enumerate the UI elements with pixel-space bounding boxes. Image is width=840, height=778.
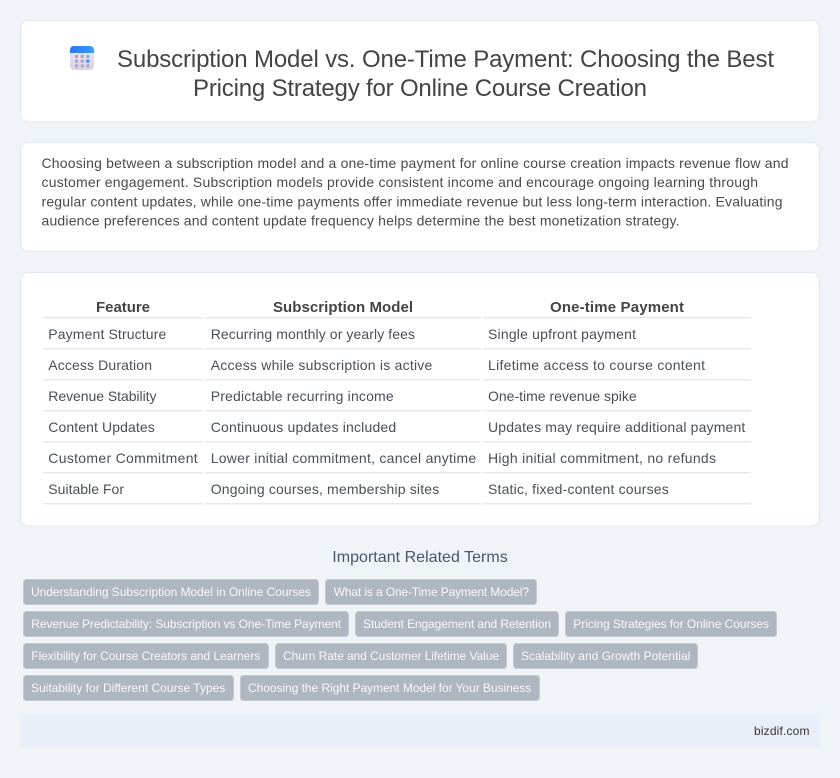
table row: Payment Structure: Payment Structure	[48, 326, 167, 342]
table row: Customer Commitment: High initial commitment, no refunds	[488, 450, 716, 466]
text block: introduction paragraph: regular content updates, while one-time payments offer immediate revenue but less long-term interaction. Evaluating	[42, 194, 782, 210]
table row: Content Updates: Continuous updates included	[211, 419, 396, 435]
table row: Revenue Stability: Revenue Stability	[48, 388, 156, 404]
tag: pricing strategies: Pricing Strategies for Online Courses	[573, 617, 769, 631]
panel: related term tags	[24, 580, 776, 700]
table row: Access Duration: Access while subscription is active	[211, 357, 433, 373]
tag: churn rate: Churn Rate and Customer Lifetime Value	[283, 649, 499, 663]
tag: understanding subscription model	[24, 580, 318, 604]
tag: churn rate	[276, 644, 506, 668]
table row: Customer Commitment: Lower initial commitment, cancel anytime	[211, 450, 476, 466]
tag: student engagement: Student Engagement and Retention	[363, 617, 551, 631]
table row: Customer Commitment	[48, 450, 716, 466]
tag: suitability: Suitability for Different Course Types	[31, 681, 225, 695]
table row: Suitable For	[48, 481, 669, 497]
heading: important related terms: Important Related Terms	[332, 549, 508, 566]
panel: introduction	[20, 142, 820, 252]
tag: scalability	[514, 644, 698, 668]
text block: introduction paragraph: audience preferences and content update frequency helps determine the best monetization strategy.	[42, 212, 680, 228]
table row: Content Updates	[48, 419, 745, 435]
text block: introduction paragraph: customer engagement. Subscription models provide consistent income and encourage ongoing learning through	[42, 174, 758, 190]
table row: Customer Commitment: Customer Commitment	[48, 450, 198, 466]
table header row: One-time Payment	[550, 299, 684, 316]
table row: Content Updates: Updates may require additional payment	[488, 419, 745, 435]
title: Subscription Model vs. One-Time Payment: Choosing the Best	[117, 46, 774, 73]
table row: Revenue Stability: Predictable recurring income	[211, 388, 394, 404]
panel: title header	[20, 20, 820, 122]
title: Pricing Strategy for Online Course Creation	[193, 75, 647, 102]
tag: choosing the right model	[240, 676, 540, 700]
tag: revenue predictability	[24, 612, 348, 636]
table row: Suitable For: Static, fixed-content courses	[488, 481, 669, 497]
table row: Payment Structure	[48, 326, 636, 342]
tag: flexibility: Flexibility for Course Creators and Learners	[31, 649, 260, 663]
table row: Access Duration	[48, 357, 705, 373]
tag: suitability	[24, 676, 234, 700]
title	[117, 46, 774, 102]
table row: Suitable For: Suitable For	[48, 481, 124, 497]
icon: calendar	[70, 46, 94, 70]
text block: introduction paragraph	[42, 155, 788, 228]
table row: Payment Structure: Recurring monthly or yearly fees	[211, 326, 415, 342]
table header row: Subscription Model	[273, 299, 413, 316]
table row: Access Duration: Access Duration	[48, 357, 152, 373]
table row: Revenue Stability: One-time revenue spike	[488, 388, 637, 404]
table row: Revenue Stability	[48, 388, 637, 404]
text block: introduction paragraph: Choosing between a subscription model and a one-time payment for online course creation impacts revenue flow and	[42, 155, 788, 171]
panel: comparison table	[20, 272, 820, 526]
tag: student engagement	[356, 612, 558, 636]
tag: understanding subscription model: Understanding Subscription Model in Online Courses	[31, 585, 311, 599]
tag: flexibility	[24, 644, 268, 668]
table row: Content Updates: Content Updates	[48, 419, 155, 435]
footer	[20, 714, 820, 748]
tag: one-time payment model	[326, 580, 536, 604]
tag: one-time payment model: What is a One-Time Payment Model?	[334, 585, 529, 599]
table header row	[96, 299, 684, 316]
tag: pricing strategies	[566, 612, 776, 636]
footer: bizdif.com	[754, 724, 810, 738]
table row: Payment Structure: Single upfront payment	[488, 326, 636, 342]
tag: choosing the right model: Choosing the Right Payment Model for Your Business	[248, 681, 531, 695]
tag: scalability: Scalability and Growth Potential	[521, 649, 690, 663]
table header row: Feature	[96, 299, 150, 316]
table row: Suitable For: Ongoing courses, membership sites	[211, 481, 439, 497]
tag: revenue predictability: Revenue Predictability: Subscription vs One-Time Payment	[31, 617, 342, 631]
table row: Access Duration: Lifetime access to course content	[488, 357, 705, 373]
